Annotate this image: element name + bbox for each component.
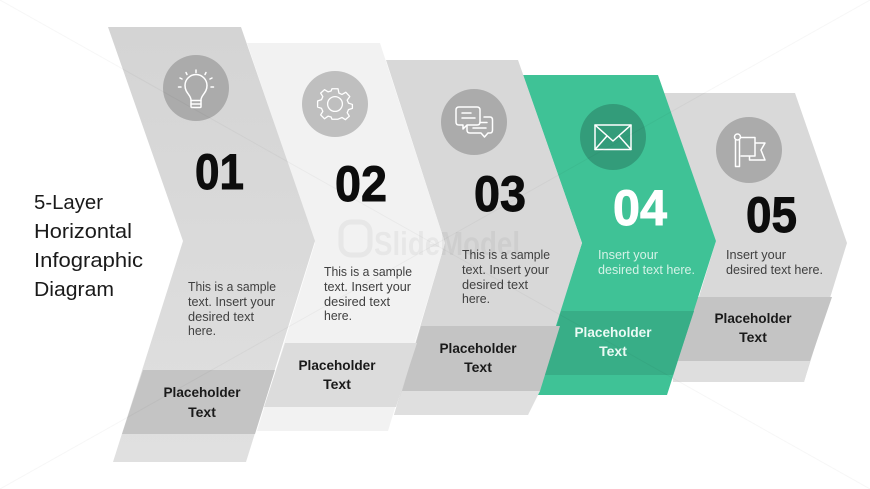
panel: layer 03: text. Insert your <box>462 263 549 277</box>
icon: gear <box>318 89 352 120</box>
panel: layer 05: Placeholder <box>714 310 792 326</box>
icon: light bulb <box>178 70 214 108</box>
panel: layer 03: here. <box>462 292 490 306</box>
panel: layer 05: 05 <box>746 187 797 243</box>
panel: layer 05: Insert your <box>726 248 786 262</box>
watermark <box>341 222 520 262</box>
panel: layer 01: here. <box>188 324 216 338</box>
panel: layer 04: 04 <box>613 180 667 236</box>
panel: layer 02: desired text <box>324 295 391 309</box>
panel: layer 04: desired text here. <box>598 263 695 277</box>
watermark: SlideModel <box>374 225 520 262</box>
title: Diagram <box>34 278 114 301</box>
panel: layer 05 <box>660 93 847 382</box>
panel: layer 04 <box>523 75 716 395</box>
panel: layer 01: desired text <box>188 310 255 324</box>
title: Horizontal <box>34 220 132 243</box>
panel: layer 03: Placeholder <box>440 340 517 356</box>
panel: layer 01 <box>108 27 315 462</box>
icon: chat bubbles <box>456 107 492 137</box>
title <box>34 191 143 301</box>
panel: layer 01: This is a sample <box>188 280 276 294</box>
panel: layer 04: Insert your <box>598 248 658 262</box>
panel: layer 03: This is a sample <box>462 248 550 262</box>
panel: layer 05: desired text here. <box>726 263 823 277</box>
panel: layer 01: 01 <box>195 144 244 200</box>
panel: layer 01: Text <box>188 404 216 420</box>
panel: layer 02 <box>247 43 445 431</box>
panel: layer 01: text. Insert your <box>188 295 275 309</box>
panel: layer 04: Placeholder <box>574 324 652 340</box>
panel: layer 05: Text <box>739 329 767 345</box>
icon: envelope <box>595 125 631 150</box>
icon: flag <box>734 134 765 166</box>
panel: layer 01: Placeholder <box>164 384 241 400</box>
panel: layer 02: Placeholder <box>298 357 376 373</box>
title: Infographic <box>34 249 143 272</box>
panel: layer 03: 03 <box>474 166 526 222</box>
panel: layer 03 <box>386 60 582 415</box>
panel: layer 02: This is a sample <box>324 265 412 279</box>
panel: layer 03: Text <box>464 359 492 375</box>
title: 5-Layer <box>34 191 103 214</box>
panel: layer 04: Text <box>599 343 627 359</box>
panel: layer 03: desired text <box>462 278 529 292</box>
panel: layer 02: text. Insert your <box>324 280 411 294</box>
panel: layer 02: Text <box>323 376 351 392</box>
panel: layer 02: here. <box>324 309 352 323</box>
panel: layer 02: 02 <box>335 156 387 212</box>
